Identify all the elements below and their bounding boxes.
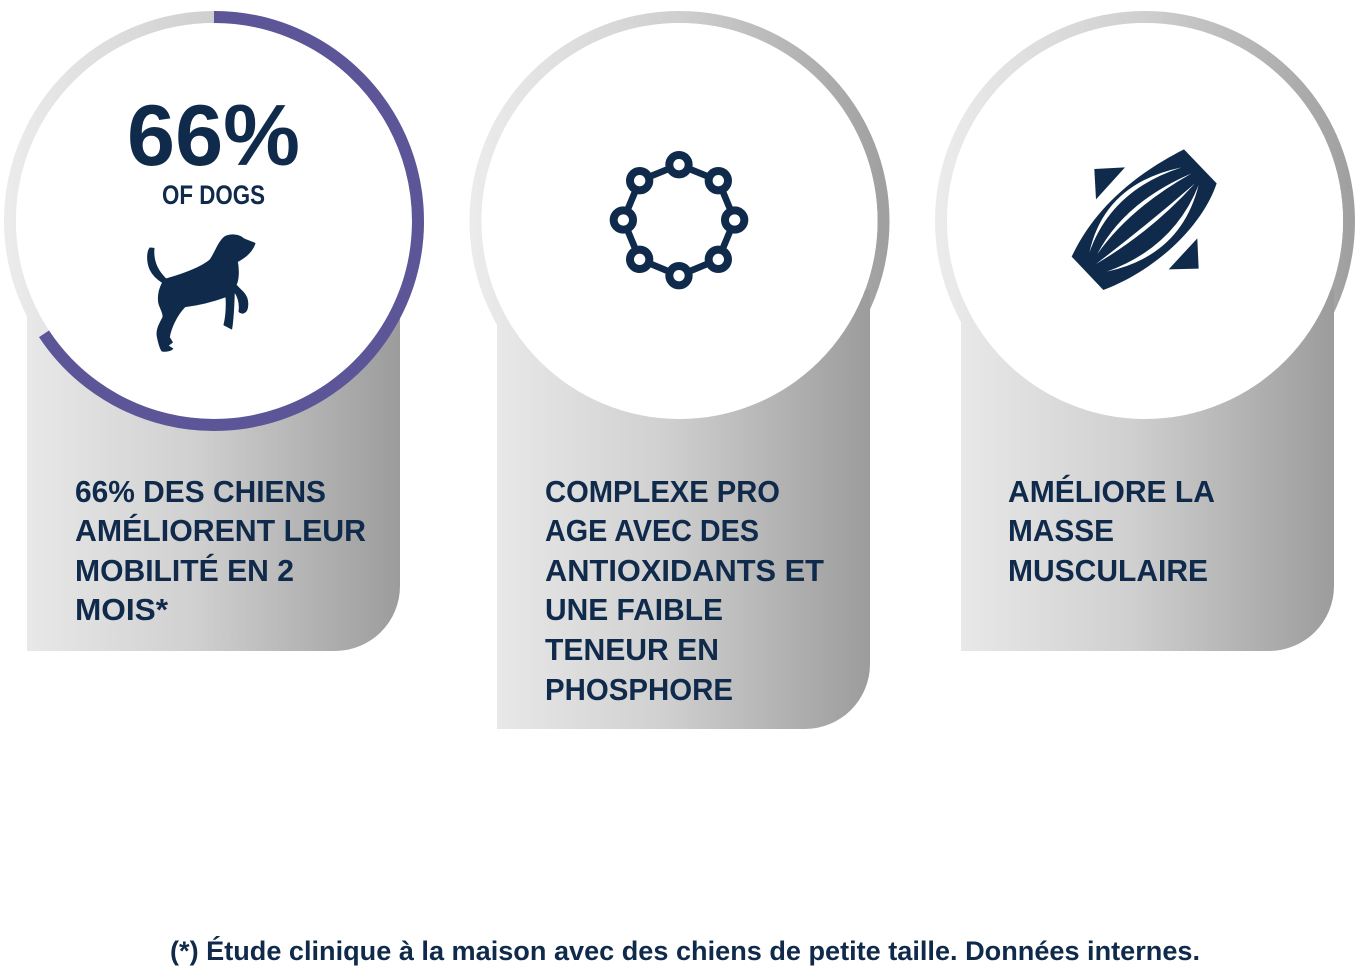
description text: 66% DES CHIENS — [75, 474, 326, 509]
circle white face — [482, 23, 878, 419]
card background — [497, 290, 870, 729]
description text: UNE FAIBLE — [545, 592, 723, 627]
description text — [75, 474, 366, 627]
circle white face — [947, 23, 1343, 419]
description text — [1008, 474, 1215, 588]
description text: AMÉLIORENT LEUR — [75, 513, 366, 548]
description text: PHOSPHORE — [545, 672, 733, 707]
footnote: (*) Étude clinique à la maison avec des chiens de petite taille. Données internes. — [170, 935, 1200, 966]
panel: masse musculaire — [941, 17, 1349, 651]
description text: MUSCULAIRE — [1008, 553, 1208, 588]
icon: dog — [148, 235, 255, 351]
icon: muscle — [1072, 149, 1217, 290]
icon: molecule ring — [614, 155, 744, 285]
progress arc 66% — [44, 17, 418, 425]
card background — [27, 290, 400, 651]
circle ring — [476, 17, 884, 425]
circle ring — [10, 17, 418, 425]
description text: AGE AVEC DES — [545, 513, 759, 548]
big number: 66% — [127, 88, 300, 184]
description text: MOIS* — [75, 592, 169, 627]
description text: ANTIOXIDANTS ET — [545, 553, 824, 588]
description text: MOBILITÉ EN 2 — [75, 553, 294, 588]
circle white face — [16, 23, 412, 419]
card background — [961, 290, 1334, 651]
description text: COMPLEXE PRO — [545, 474, 780, 509]
panel: complexe pro age — [476, 17, 884, 729]
description text — [545, 474, 824, 707]
description text: MASSE — [1008, 513, 1114, 548]
panel: mobilité — [10, 17, 418, 651]
circle ring — [941, 17, 1349, 425]
description text: TENEUR EN — [545, 632, 719, 667]
description text: AMÉLIORE LA — [1008, 474, 1215, 509]
of dogs label: OF DOGS — [162, 180, 265, 210]
